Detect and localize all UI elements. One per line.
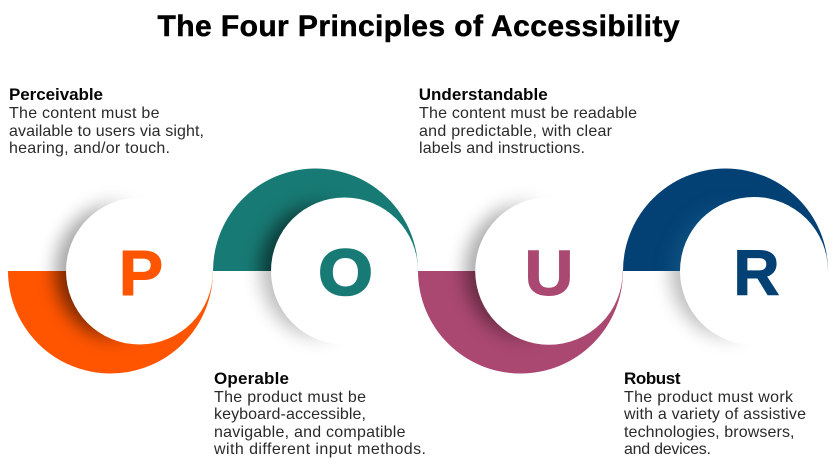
shadow on teal — [250, 196, 328, 271]
badge: P — [8, 198, 213, 373]
text block: Perceivable: Perceivable — [9, 85, 103, 104]
magenta half disc — [418, 271, 623, 374]
navy half disc — [623, 169, 828, 271]
text block: Robust: Robust — [624, 369, 681, 388]
shadow below baseline — [252, 271, 326, 344]
soft highlight on navy — [672, 213, 708, 271]
white circle — [680, 197, 828, 345]
letter U: U — [525, 237, 573, 309]
text block: Robust: and devices. — [624, 441, 711, 458]
letter R: R — [733, 237, 780, 309]
text block: Understandable: and predictable, with clear — [419, 123, 613, 140]
text block: Operable: Operable — [214, 369, 289, 388]
white circle — [66, 198, 213, 344]
badge: U — [418, 197, 623, 374]
text block: Operable — [213, 369, 426, 458]
shadow on orange — [43, 271, 128, 349]
badge: R — [623, 169, 828, 345]
orange half disc — [8, 271, 213, 373]
text block: Understandable: Understandable — [419, 85, 548, 104]
text block: Perceivable: available to users via sight, — [9, 123, 204, 140]
shadow on magenta — [455, 271, 532, 346]
teal half disc — [213, 169, 418, 271]
letter O: O — [319, 238, 372, 309]
text block: Robust: with a variety of assistive — [623, 406, 806, 423]
shadow above baseline — [454, 196, 534, 271]
text block: Perceivable: The content must be — [9, 105, 160, 122]
text block: Operable: keyboard-accessible, — [214, 406, 366, 423]
text block: Operable: navigable, and compatible — [214, 424, 406, 441]
shadow below baseline — [661, 271, 734, 344]
text block: Operable: with different input methods. — [213, 441, 426, 458]
text block: Understandable: The content must be readable — [419, 105, 637, 122]
letter P: P — [119, 237, 163, 309]
text block: Robust: technologies, browsers, — [624, 424, 794, 441]
text block: Operable: The product must be — [214, 389, 366, 406]
white circle — [271, 198, 418, 344]
shadow above baseline — [44, 195, 125, 271]
text block: Robust — [623, 369, 806, 458]
text block: Understandable: labels and instructions. — [419, 140, 585, 157]
text block: Understandable — [419, 85, 637, 157]
text block: Perceivable: hearing, and/or touch. — [9, 140, 170, 157]
badge: O — [213, 169, 418, 344]
title: The Four Principles of Accessibility — [158, 10, 680, 43]
white circle — [475, 197, 623, 345]
text block: Robust: The product must work — [624, 389, 794, 406]
text block: Perceivable — [9, 85, 204, 157]
